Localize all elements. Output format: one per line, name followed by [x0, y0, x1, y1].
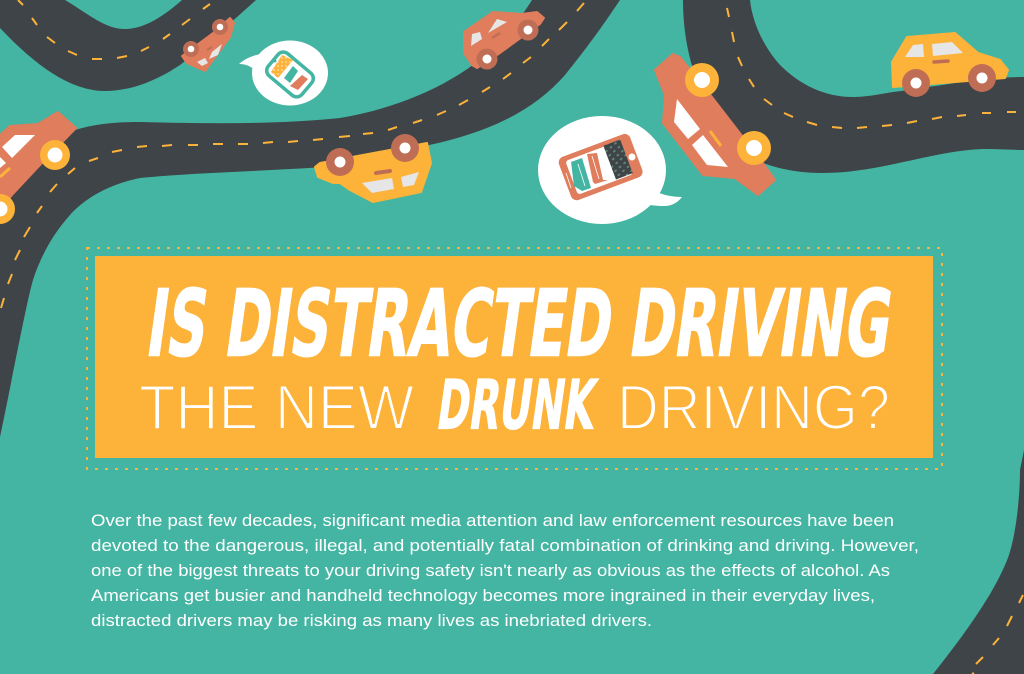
icon: small phone: [264, 49, 316, 100]
car: big salmon, right of centre: [655, 54, 775, 195]
intro paragraph: Americans get busier and handheld technology becomes more ingrained in their everyday lives,: [91, 587, 875, 605]
speech bubble: small with phone: [239, 40, 328, 106]
car: yellow, upside down: [315, 134, 431, 202]
intro paragraph: Over the past few decades, significant media attention and law enforcement resources have been: [91, 512, 894, 530]
intro paragraph: one of the biggest threats to your driving safety isn't nearly as obvious as the effects of alcohol. As: [91, 562, 890, 580]
title line 2: DRIVING?: [617, 373, 890, 443]
title banner: [87, 248, 942, 469]
car: small salmon, top left: [182, 18, 234, 71]
title line 2: THE NEW: [139, 373, 415, 443]
road: centre, winding from left edge to top: [0, 0, 620, 437]
car: yellow, top right: [892, 33, 1008, 97]
speech bubble: large with phone: [538, 116, 682, 224]
intro paragraph: [91, 512, 919, 630]
intro paragraph: distracted drivers may be risking as many lives as inebriated drivers.: [91, 612, 652, 630]
road: top left: [0, 0, 256, 91]
title line 2: DRUNK: [433, 367, 602, 445]
road: bottom right: [933, 450, 1024, 674]
icon: large phone: [557, 132, 644, 202]
road: top right: [683, 0, 1024, 173]
intro paragraph: devoted to the dangerous, illegal, and potentially fatal combination of drinking and driving. However,: [91, 537, 919, 555]
title line 2: [139, 367, 890, 445]
car: salmon, top centre: [464, 12, 544, 70]
car: salmon, far left: [0, 112, 76, 224]
